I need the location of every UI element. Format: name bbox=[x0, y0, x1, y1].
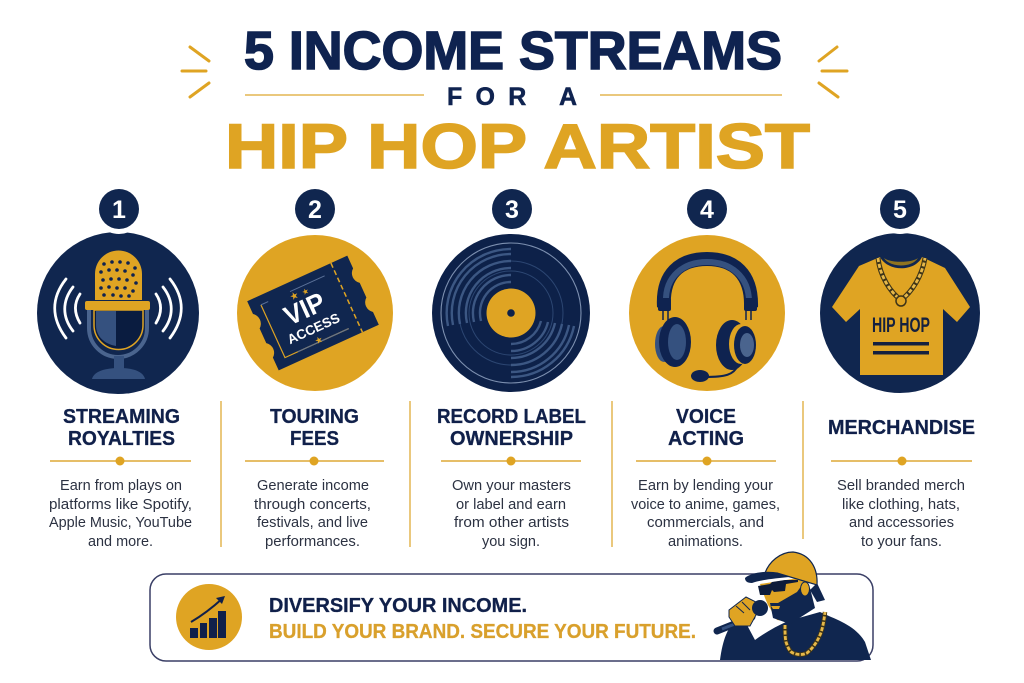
description: streaming royalties: Apple Music, YouTube bbox=[49, 515, 192, 531]
description: voice acting bbox=[631, 478, 780, 550]
description: touring fees: performances. bbox=[265, 534, 360, 550]
panel: record label ownership bbox=[432, 184, 590, 550]
badge: number 4 bbox=[687, 189, 727, 229]
badge: number 2 bbox=[295, 189, 335, 229]
description: merchandise: to your fans. bbox=[861, 534, 942, 550]
text: build your brand: BUILD YOUR BRAND. SECURE YOUR FUTURE. bbox=[269, 621, 696, 643]
description: record label ownership bbox=[452, 478, 571, 550]
description: merchandise: like clothing, hats, bbox=[842, 497, 960, 513]
icon: growth chart bbox=[176, 584, 242, 650]
description: record label ownership: Own your masters bbox=[452, 478, 571, 494]
description: voice acting: Earn by lending your bbox=[638, 478, 773, 494]
heading: touring fees: TOURING bbox=[270, 406, 359, 428]
icon: vip ticket: ★ bbox=[300, 286, 311, 297]
description: touring fees bbox=[254, 478, 371, 550]
badge: number 5: 5 bbox=[893, 196, 907, 224]
text: diversify your income: DIVERSIFY YOUR INCOME. bbox=[269, 595, 527, 617]
panel: touring fees bbox=[237, 184, 393, 550]
heading: streaming royalties bbox=[63, 406, 180, 450]
icon: t-shirt with chain: HIP HOP bbox=[872, 314, 930, 337]
description: record label ownership: from other artists bbox=[454, 515, 569, 531]
description: voice acting: animations. bbox=[668, 534, 743, 550]
description: streaming royalties: Earn from plays on bbox=[60, 478, 182, 494]
badge: number 2: 2 bbox=[308, 196, 322, 224]
badge: number 5 bbox=[880, 189, 920, 229]
description: record label ownership: you sign. bbox=[482, 534, 540, 550]
panel: merchandise bbox=[820, 184, 980, 550]
heading: touring fees: FEES bbox=[290, 428, 339, 450]
icon: rapper with microphone bbox=[717, 552, 871, 660]
description: record label ownership: or label and earn bbox=[456, 497, 566, 513]
heading: voice acting bbox=[668, 406, 744, 450]
description: streaming royalties bbox=[49, 478, 192, 550]
icon: vip ticket: ★ bbox=[313, 334, 324, 346]
icon: microphone bbox=[37, 184, 199, 394]
subtitle: for a: FOR A bbox=[447, 83, 577, 111]
heading: voice acting: ACTING bbox=[668, 428, 744, 450]
icon: headset bbox=[629, 184, 785, 391]
heading: record label ownership bbox=[437, 406, 586, 450]
icon: right sunburst bbox=[819, 47, 847, 97]
heading: record label ownership: OWNERSHIP bbox=[450, 428, 573, 450]
description: merchandise: Sell branded merch bbox=[837, 478, 965, 494]
heading: touring fees bbox=[270, 406, 359, 450]
title: hip hop artist: HIP HOP ARTIST bbox=[225, 112, 810, 182]
heading: streaming royalties: STREAMING bbox=[63, 406, 180, 428]
heading: voice acting: VOICE bbox=[676, 406, 736, 428]
badge: number 4: 4 bbox=[700, 196, 714, 224]
title: 5 income streams: 5 INCOME STREAMS bbox=[244, 21, 782, 81]
icon: vip ticket bbox=[237, 184, 393, 391]
title rule left bbox=[245, 94, 424, 96]
description: voice acting: commercials, and bbox=[647, 515, 764, 531]
callout: bottom banner bbox=[150, 552, 873, 661]
heading: streaming royalties: ROYALTIES bbox=[68, 428, 175, 450]
description: merchandise: and accessories bbox=[849, 515, 954, 531]
icon: vip ticket: ★ bbox=[288, 290, 301, 304]
description: streaming royalties: and more. bbox=[88, 534, 153, 550]
title rule right bbox=[600, 94, 782, 96]
badge: number 1: 1 bbox=[112, 196, 126, 224]
icon: vip ticket: ACCESS bbox=[285, 310, 342, 347]
icon: t-shirt with chain bbox=[820, 184, 980, 393]
heading: record label ownership: RECORD LABEL bbox=[437, 406, 586, 428]
description: streaming royalties: platforms like Spotify, bbox=[49, 497, 192, 513]
description: merchandise bbox=[837, 478, 965, 550]
badge: number 3: 3 bbox=[505, 196, 519, 224]
description: touring fees: festivals, and live bbox=[257, 515, 368, 531]
description: touring fees: through concerts, bbox=[254, 497, 371, 513]
badge: number 3 bbox=[492, 189, 532, 229]
panel: voice acting bbox=[629, 184, 785, 550]
panel: streaming royalties bbox=[37, 184, 199, 550]
badge: number 1 bbox=[99, 189, 139, 229]
description: touring fees: Generate income bbox=[257, 478, 369, 494]
description: voice acting: voice to anime, games, bbox=[631, 497, 780, 513]
icon: left sunburst bbox=[182, 47, 209, 97]
icon: vip ticket: VIP bbox=[279, 287, 330, 331]
icon: vinyl record bbox=[432, 184, 590, 392]
heading: merchandise: MERCHANDISE bbox=[828, 417, 975, 439]
